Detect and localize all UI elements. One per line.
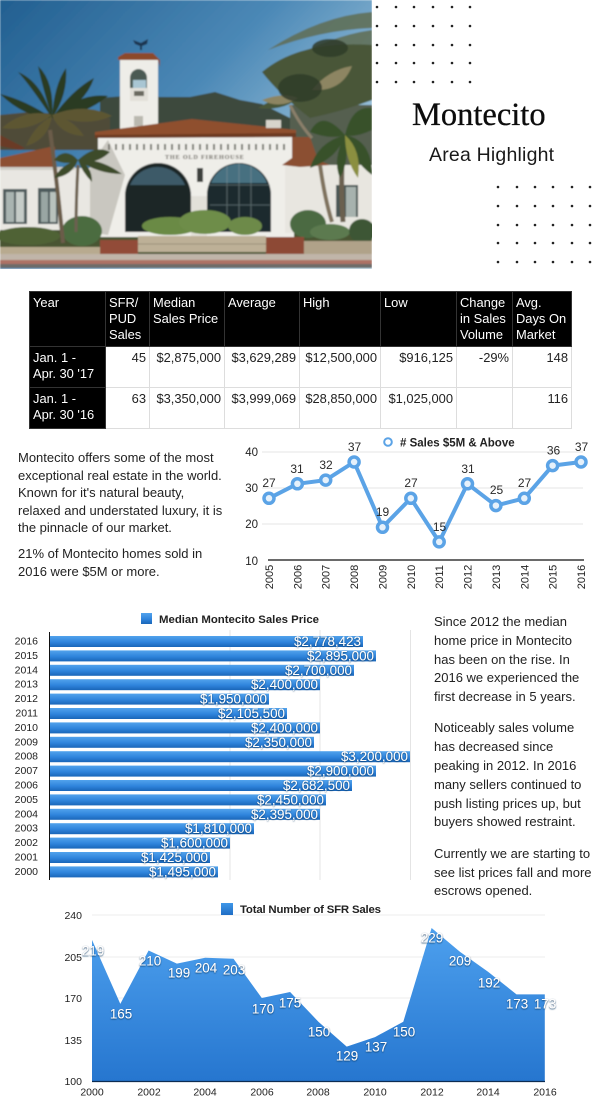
arches (125, 163, 191, 232)
market statistics table: Low (384, 295, 408, 310)
x axis labels: 2012 (420, 1086, 444, 1098)
year labels: 2008 (15, 751, 38, 763)
text block: median price commentary: has decreased since (434, 739, 553, 754)
shrubs (0, 227, 60, 245)
value labels: 229 (421, 930, 443, 946)
area chart: total number of SFR sales (64, 903, 557, 1098)
data labels: 27 (262, 476, 276, 490)
x axis labels (80, 1086, 557, 1098)
x axis labels: 2016 (533, 1086, 557, 1098)
text block: Montecito introduction: 21% of Montecito homes sold in (18, 546, 202, 561)
subtitle: Area Highlight (429, 144, 554, 166)
bar chart: median Montecito sales price (15, 613, 411, 880)
market statistics table: 63 (132, 391, 146, 406)
market statistics table: Average (228, 295, 276, 310)
value labels: $2,700,000 (285, 663, 352, 678)
y axis labels: 100 (64, 1076, 82, 1088)
year labels: 2003 (15, 823, 38, 835)
market statistics table: 45 (132, 350, 146, 365)
market statistics table: $1,025,000 (388, 391, 453, 406)
text block: Montecito introduction: the pinnacle of our market. (18, 520, 172, 535)
text block: Montecito introduction (18, 450, 222, 579)
legend: Median Montecito Sales Price (159, 614, 319, 626)
year labels: 2012 (462, 565, 474, 589)
x axis labels: 2014 (476, 1086, 500, 1098)
y axis labels: 205 (64, 952, 82, 964)
building body (0, 168, 110, 230)
market statistics table: Volume (460, 327, 503, 342)
data labels (262, 440, 588, 534)
small palm (76, 165, 78, 232)
year labels: 2002 (15, 837, 38, 849)
market statistics table: $3,350,000 (156, 391, 221, 406)
year labels: 2014 (15, 664, 38, 676)
year labels: 2006 (292, 565, 304, 589)
value labels: $2,105,500 (218, 706, 285, 721)
text block: Montecito introduction: Known for it's natural beauty, (18, 485, 184, 500)
x axis labels: 2008 (306, 1086, 330, 1098)
market statistics table: -29% (479, 350, 509, 365)
main roof (95, 119, 296, 137)
market statistics table: $3,999,069 (231, 391, 296, 406)
right palm (310, 108, 372, 178)
legend: # Sales $5M & Above (400, 438, 515, 450)
market statistics table: in Sales (460, 311, 506, 326)
value labels: $2,682,500 (283, 778, 350, 793)
windows (3, 189, 27, 224)
dot pattern: bottom (496, 186, 592, 264)
data labels: 27 (404, 476, 418, 490)
text block: median price commentary: first decrease in 5 years. (434, 689, 576, 704)
year labels: 2005 (264, 565, 276, 589)
market statistics table: Jan. 1 - (33, 350, 76, 365)
year labels: 2009 (378, 565, 390, 589)
right tree foliage (268, 12, 372, 62)
market statistics table: Sales Price (153, 311, 218, 326)
market statistics table: Market (516, 327, 555, 342)
x axis labels: 2002 (137, 1086, 161, 1098)
data labels: 37 (575, 440, 588, 454)
photo: The Old Firehouse building (0, 0, 372, 269)
market statistics table: 116 (547, 391, 568, 406)
text block: median price commentary: push listing prices up, but (434, 796, 581, 811)
year labels: 2015 (15, 650, 38, 662)
market statistics table: Jan. 1 - (33, 391, 76, 406)
data labels: 31 (290, 462, 304, 476)
data labels: 37 (348, 440, 361, 454)
value labels: $1,950,000 (200, 692, 267, 707)
year labels: 2011 (434, 565, 446, 589)
year labels: 2004 (15, 808, 38, 820)
sign text: THE OLD FIREHOUSE (165, 154, 245, 161)
y axis labels: 30 (245, 483, 258, 495)
text block: Montecito introduction: relaxed and understated luxury, it is (18, 503, 222, 518)
market statistics table: Change (460, 295, 505, 310)
market statistics table: Apr. 30 '16 (33, 407, 94, 422)
market statistics table: $12,500,000 (305, 350, 377, 365)
text block: median price commentary: 2016 we experienced the (434, 670, 579, 685)
x axis labels: 2010 (363, 1086, 387, 1098)
year labels: 2011 (15, 708, 38, 720)
text block: median price commentary: Currently we are starting to (434, 846, 590, 861)
value labels: $2,900,000 (307, 764, 374, 779)
text block: median price commentary: Since 2012 the median (434, 614, 567, 629)
data labels: 31 (461, 462, 475, 476)
value labels: $2,778,423 (294, 634, 361, 649)
data labels: 27 (518, 476, 531, 490)
y axis labels: 10 (245, 556, 258, 568)
year labels: 2005 (15, 794, 38, 806)
value labels: $1,425,000 (141, 850, 208, 865)
market statistics table: PUD (109, 311, 136, 326)
mountains (100, 92, 300, 137)
market statistics table: $2,875,000 (156, 350, 221, 365)
value labels: 175 (279, 996, 301, 1010)
market statistics table: $916,125 (399, 350, 453, 365)
year labels: 2007 (321, 565, 333, 589)
data labels: 36 (547, 444, 560, 458)
market statistics table: SFR/ (109, 295, 138, 310)
x axis labels: 2006 (250, 1086, 274, 1098)
market statistics table: Apr. 30 '17 (33, 366, 94, 381)
data labels: 25 (490, 483, 503, 497)
market statistics table: Sales (109, 327, 141, 342)
value labels: 173 (534, 996, 556, 1012)
text block: median price commentary: escrows opened. (434, 883, 532, 898)
text block: median price commentary (434, 614, 592, 898)
year labels: 2016 (576, 565, 588, 589)
market statistics table: Avg. (516, 295, 542, 310)
year labels: 2016 (15, 636, 38, 648)
data labels: 15 (433, 520, 446, 534)
market statistics table: High (303, 295, 330, 310)
x axis labels: 2004 (193, 1086, 217, 1098)
text block: median price commentary: has been on the rise. In (434, 652, 570, 667)
market statistics table (29, 291, 572, 429)
pavement (0, 254, 372, 261)
value labels: 210 (139, 954, 161, 968)
value labels: $2,450,000 (257, 792, 324, 807)
planters and steps (100, 240, 138, 254)
legend: Total Number of SFR Sales (240, 904, 381, 916)
text block: median price commentary: Noticeably sales volume (434, 720, 574, 735)
data labels: 32 (319, 458, 333, 472)
left palm (50, 130, 63, 243)
text block: median price commentary: many sellers continued to (434, 777, 581, 792)
year labels: 2012 (15, 693, 38, 705)
text block: Montecito introduction: exceptional real estate in the world. (18, 468, 222, 483)
title: Montecito (412, 97, 546, 133)
year labels: 2015 (548, 565, 560, 589)
market statistics table: $28,850,000 (305, 391, 377, 406)
market statistics table: Year (33, 295, 59, 310)
value labels: 165 (110, 1006, 132, 1022)
text block: median price commentary: home price in Montecito (434, 633, 572, 648)
tower (120, 60, 158, 130)
value labels: 209 (449, 954, 471, 968)
text block: Montecito introduction: Montecito offers some of the most (18, 450, 214, 465)
value labels: 170 (252, 1002, 274, 1016)
value labels: 150 (308, 1024, 330, 1040)
frieze (108, 144, 290, 150)
value labels: 150 (393, 1024, 415, 1040)
value labels: $2,400,000 (251, 720, 318, 735)
y axis labels: 240 (64, 910, 82, 922)
data labels: 19 (376, 505, 389, 519)
value labels: 129 (336, 1048, 358, 1064)
year labels: 2006 (15, 780, 38, 792)
bars (50, 636, 410, 877)
text block: median price commentary: see list prices fall and more (434, 865, 592, 880)
text block: median price commentary: buyers showed restraint. (434, 814, 576, 829)
value labels: $2,895,000 (307, 648, 374, 663)
market statistics table: Median (153, 295, 195, 310)
value labels: 192 (478, 976, 500, 990)
y axis labels: 40 (245, 447, 258, 459)
value labels: 137 (365, 1040, 387, 1054)
year labels: 2014 (519, 565, 531, 589)
text block: Montecito introduction: 2016 were $5M or more. (18, 564, 160, 579)
value labels: 219 (82, 944, 104, 958)
market statistics table: 148 (546, 350, 568, 365)
value labels: 203 (223, 962, 245, 978)
value labels: $2,350,000 (245, 735, 312, 750)
value labels: $1,810,000 (185, 821, 252, 836)
year labels: 2010 (15, 722, 38, 734)
dot pattern: top (376, 6, 472, 84)
trend line (264, 457, 586, 547)
area (92, 928, 545, 1081)
text block: median price commentary: peaking in 2012. In 2016 (434, 758, 576, 773)
y axis labels: 170 (64, 993, 82, 1005)
year labels: 2013 (491, 565, 503, 589)
year labels (264, 565, 588, 589)
value labels: 173 (506, 996, 528, 1012)
value labels: 204 (195, 960, 218, 976)
y axis labels (64, 910, 82, 1088)
year labels: 2000 (15, 866, 38, 878)
value labels: $1,495,000 (149, 864, 216, 879)
value labels: $1,600,000 (161, 836, 228, 851)
year labels: 2008 (349, 565, 361, 589)
y axis labels: 135 (64, 1035, 82, 1047)
value labels: $3,200,000 (341, 749, 408, 764)
year labels: 2010 (406, 565, 418, 589)
year labels: 2007 (15, 765, 38, 777)
line chart: number of sales $5M and above (245, 437, 588, 589)
y axis labels (245, 447, 258, 568)
value labels: 199 (168, 966, 190, 980)
year labels: 2013 (15, 679, 38, 691)
market statistics table: Days On (516, 311, 566, 326)
value labels (141, 634, 408, 879)
x axis labels: 2000 (80, 1086, 104, 1098)
year labels: 2001 (15, 852, 38, 864)
y axis labels: 20 (245, 519, 258, 531)
year labels: 2009 (15, 736, 38, 748)
value labels: $2,395,000 (251, 807, 318, 822)
year labels (15, 636, 38, 878)
value labels (82, 930, 556, 1064)
ground base (0, 226, 372, 256)
value labels: $2,400,000 (251, 677, 318, 692)
market statistics table: $3,629,289 (231, 350, 296, 365)
